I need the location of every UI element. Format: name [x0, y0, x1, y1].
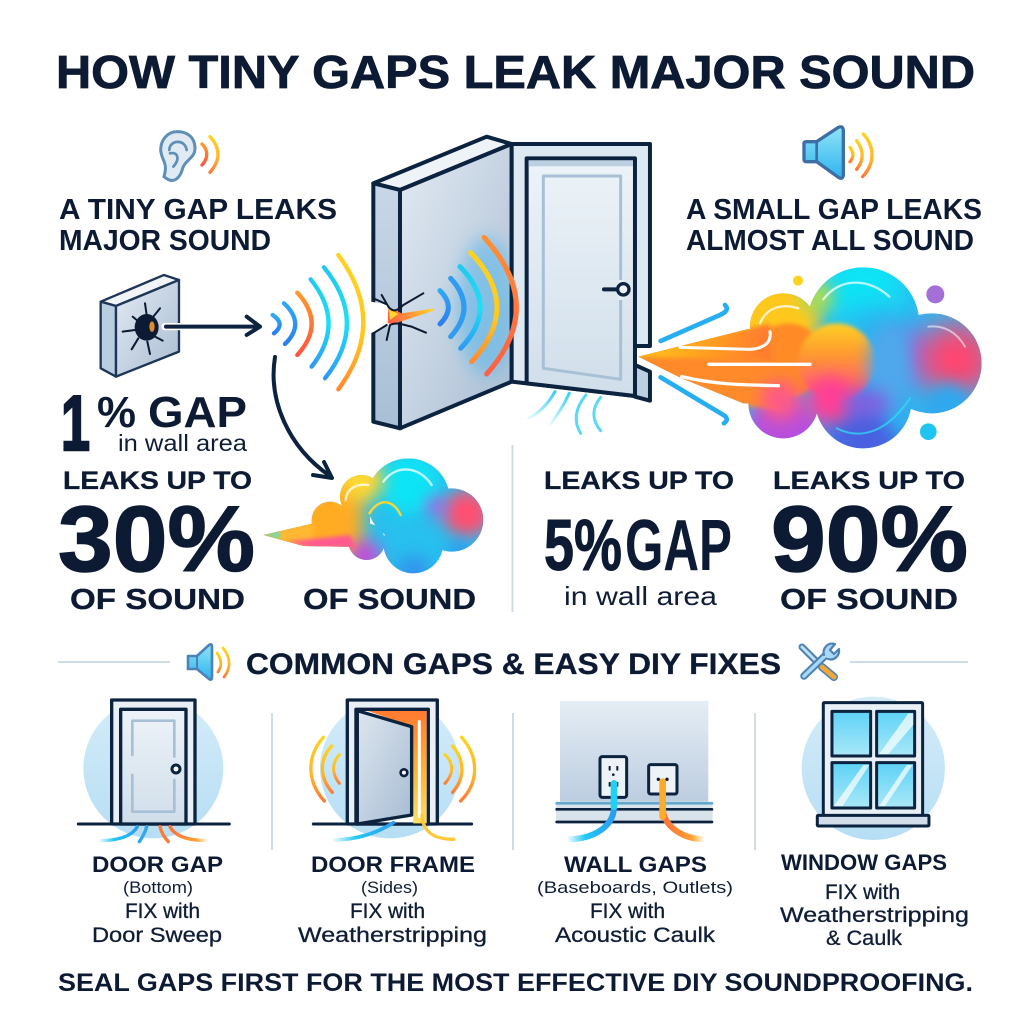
wall gaps text [537, 852, 733, 947]
icon: speaker top right [804, 127, 872, 178]
window icon [802, 697, 945, 840]
icon: cracked wall block with arrow and waves [101, 255, 363, 389]
window gaps text: WINDOW GAPS [781, 850, 947, 875]
cloud highlights [346, 469, 432, 515]
door gap text: (Bottom) [123, 878, 193, 897]
wall gaps text: Acoustic Caulk [555, 924, 716, 947]
stat: leaks up to 90% of sound: LEAKS UP TO [773, 467, 965, 495]
wall gaps text: WALL GAPS [564, 852, 707, 877]
left heading [59, 194, 337, 257]
door gap text: DOOR GAP [92, 852, 223, 877]
window gaps text [780, 850, 969, 950]
sound waves [273, 255, 363, 389]
door gap text [92, 852, 223, 947]
stat: 5% gap: LEAKS UP TO [544, 467, 734, 495]
open door icon [311, 698, 475, 840]
title: HOW TINY GAPS LEAK MAJOR SOUND [56, 46, 975, 98]
wall gaps text: (Baseboards, Outlets) [537, 878, 733, 897]
label: of sound under small cloud: OF SOUND [303, 584, 476, 616]
left heading: A TINY GAP LEAKS [59, 194, 337, 226]
handle [604, 280, 629, 300]
stat: 5% gap: 5% [544, 506, 622, 586]
cracked block [101, 275, 179, 377]
cloud body [638, 267, 982, 448]
stat: 1% gap: in wall area [118, 430, 247, 456]
door icon [78, 698, 229, 842]
wall [373, 137, 512, 428]
icon: screwdriver and wrench [802, 644, 839, 677]
crack gap [371, 293, 434, 340]
panel: window gaps [780, 697, 969, 950]
stat: leaks up to 30% of sound [58, 467, 255, 616]
door frame text: FIX with [350, 900, 425, 923]
stat: 5% gap: in wall area [564, 581, 718, 611]
door leaf [527, 158, 635, 396]
door frame text [298, 852, 487, 947]
stat: 1% gap: 1 [61, 379, 90, 467]
stat: 1% gap [61, 379, 247, 467]
left heading: MAJOR SOUND [59, 225, 271, 257]
wall and outlet icon [556, 701, 713, 839]
curved arrow to small cloud [274, 357, 332, 478]
panel: door gap [78, 698, 229, 947]
waves in wall [440, 237, 516, 374]
large colourful sound cloud [638, 267, 982, 448]
small colourful sound cloud [264, 458, 484, 574]
stat: 5% gap: GAP [625, 506, 732, 586]
wave glow [457, 237, 517, 377]
arrow [165, 317, 260, 335]
window gaps text: & Caulk [826, 927, 903, 950]
icon: section speaker [188, 644, 229, 680]
stat: 5% gap [544, 467, 734, 611]
right heading: ALMOST ALL SOUND [686, 225, 974, 257]
door gap text: FIX with [125, 900, 200, 923]
door frame text: DOOR FRAME [311, 852, 475, 877]
stat: leaks up to 30% of sound: 30% [58, 487, 255, 591]
door frame text: Weatherstripping [298, 924, 487, 947]
cloud particles [793, 276, 944, 440]
airflow under door [525, 392, 601, 433]
stat: 1% gap: GAP [148, 388, 247, 437]
wall gaps text: FIX with [590, 900, 665, 923]
right heading: A SMALL GAP LEAKS [686, 194, 982, 226]
crack hole [123, 303, 163, 354]
footer takeaway: SEAL GAPS FIRST FOR THE MOST EFFECTIVE DIY SOUNDPROOFING. [58, 969, 973, 997]
window gaps text: Weatherstripping [780, 904, 969, 927]
stat: leaks up to 30% of sound: OF SOUND [70, 584, 245, 616]
main wall and door illustration [371, 137, 650, 433]
stat: 1% gap: % [97, 388, 136, 437]
stat: leaks up to 30% of sound: LEAKS UP TO [63, 467, 252, 495]
blue burst lines [661, 305, 727, 423]
stat: leaks up to 90% of sound: 90% [771, 487, 968, 591]
door frame text: (Sides) [361, 878, 418, 897]
panel: wall gaps [537, 701, 733, 947]
icon: ear with sound waves [161, 132, 218, 180]
window gaps text: FIX with [825, 881, 900, 904]
door frame [512, 144, 650, 401]
stat: leaks up to 90% of sound: OF SOUND [780, 584, 958, 616]
cloud highlights and jet lines [680, 283, 965, 434]
right heading [686, 194, 982, 257]
stat: leaks up to 90% of sound [771, 467, 968, 616]
panel: door frame [298, 698, 487, 947]
door gap text: Door Sweep [92, 924, 222, 947]
section heading: COMMON GAPS & EASY DIY FIXES [246, 648, 781, 681]
